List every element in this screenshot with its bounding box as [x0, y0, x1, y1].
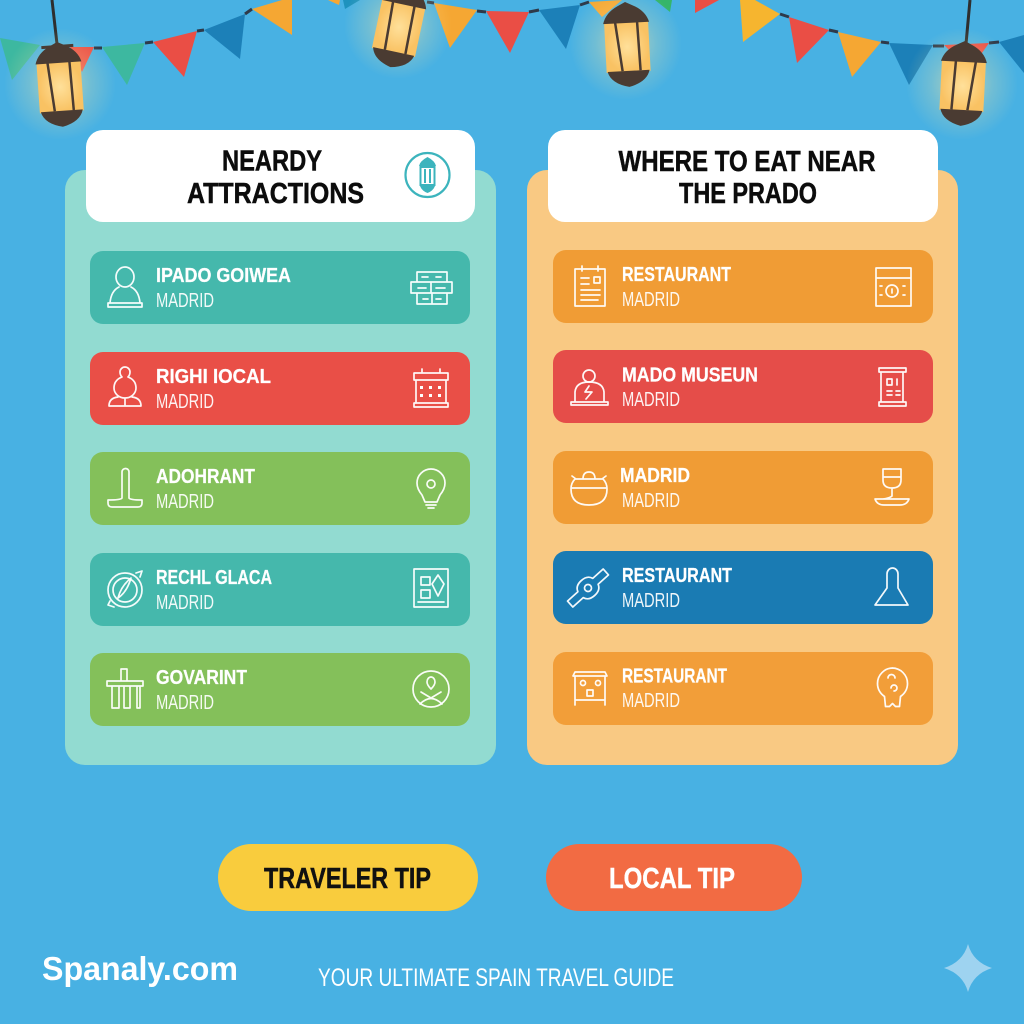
row: Madrid: MADRID: [622, 490, 680, 512]
brand name: Spanaly.com: [42, 950, 238, 987]
heading card: where to eat near the Prado: [548, 130, 938, 222]
row: Righ Iocal: [90, 352, 470, 425]
button: local tip: LOCAL TIP: [609, 863, 735, 895]
panel: nearby attractions: [65, 130, 496, 765]
row: Righ Iocal: MADRID: [156, 391, 214, 413]
row: Madrid: [553, 451, 933, 524]
button: traveler tip: [218, 844, 478, 911]
icon: lantern badge: [406, 153, 450, 197]
row: Righ Iocal: RIGHI IOCAL: [156, 366, 271, 388]
button: local tip: [546, 844, 802, 911]
row: Restaurant 1: [553, 250, 933, 323]
lantern 1: [4, 0, 116, 140]
row: Adohrant: MADRID: [156, 491, 214, 513]
row: Govarint: GOVARINT: [156, 667, 247, 689]
row: Mado Museun: MADRID: [622, 389, 680, 411]
lantern 3: [570, 0, 682, 100]
row: Restaurant 2: MADRID: [622, 590, 680, 612]
icon: sparkle star: [944, 944, 992, 992]
heading card: where to eat near the Prado: WHERE TO EAT NEAR: [618, 146, 876, 178]
row: Mado Museun: MADO MUSEUN: [622, 364, 758, 386]
lantern 4: [906, 0, 1018, 140]
row: Rechl Glaca: [90, 553, 470, 626]
row: Restaurant 1: MADRID: [622, 289, 680, 311]
lantern 2: [344, 0, 452, 79]
row: Adohrant: ADOHRANT: [156, 466, 255, 488]
bunting garland: [0, 0, 1024, 85]
row: Rechl Glaca: RECHL GLACA: [156, 567, 272, 589]
row: Govarint: [90, 653, 470, 726]
heading card: nearby attractions: [86, 130, 475, 222]
row: Restaurant 3: MADRID: [622, 690, 680, 712]
row: Ipado Goiwea: MADRID: [156, 290, 214, 312]
row: Govarint: MADRID: [156, 692, 214, 714]
row: Adohrant: [90, 452, 470, 525]
row: Restaurant 1: RESTAURANT: [622, 264, 731, 286]
row: Restaurant 2: [553, 551, 933, 624]
row: Restaurant 2: RESTAURANT: [622, 565, 732, 587]
panel: where to eat: [527, 130, 958, 765]
heading card: nearby attractions: NEARDY: [222, 146, 322, 178]
row: Ipado Goiwea: [90, 251, 470, 324]
row: Mado Museun: [553, 350, 933, 423]
row: Madrid: MADRID: [620, 465, 690, 487]
heading card: nearby attractions: ATTRACTIONS: [187, 178, 364, 210]
heading card: where to eat near the Prado: THE PRADO: [679, 178, 817, 210]
row: Ipado Goiwea: IPADO GOIWEA: [156, 265, 291, 287]
row: Restaurant 3: [553, 652, 933, 725]
tagline: YOUR ULTIMATE SPAIN TRAVEL GUIDE: [318, 964, 674, 992]
row: Rechl Glaca: MADRID: [156, 592, 214, 614]
row: Restaurant 3: RESTAURANT: [622, 666, 727, 688]
button: traveler tip: TRAVELER TIP: [264, 863, 431, 895]
